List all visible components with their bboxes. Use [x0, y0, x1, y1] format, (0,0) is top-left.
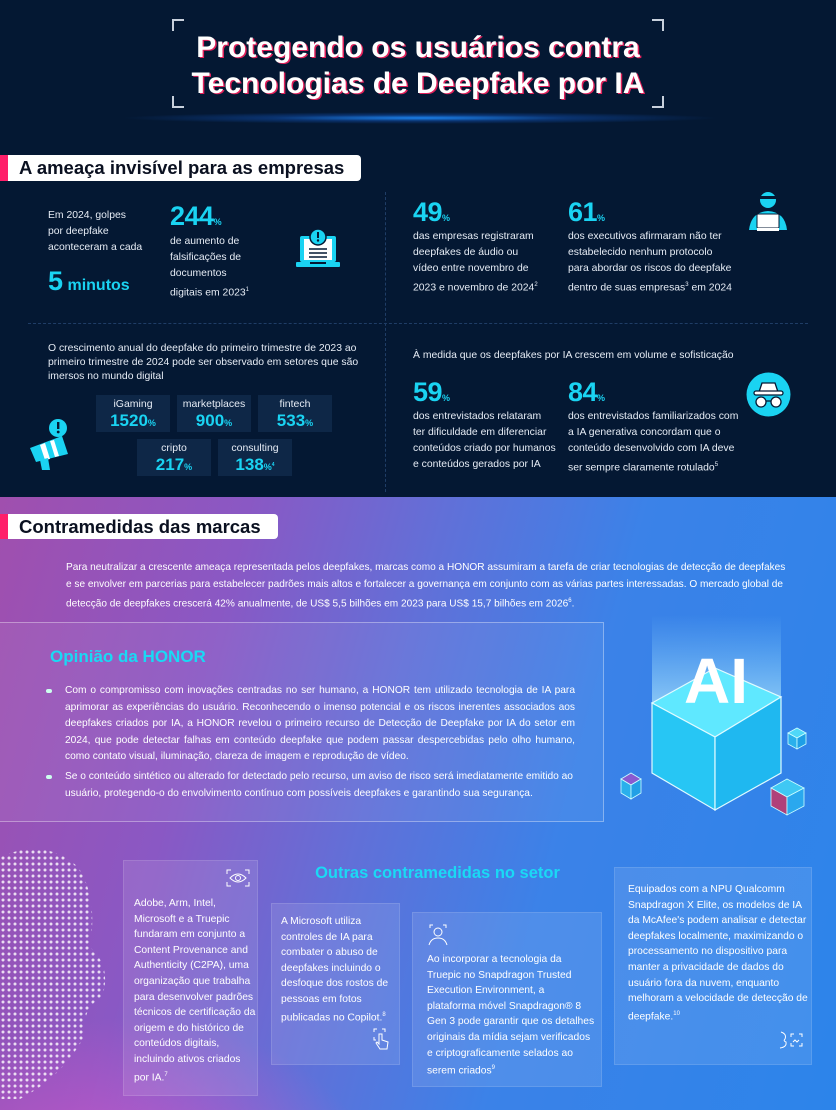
stat: 49%: 49%: [413, 197, 450, 227]
stat: 244%: 244%: [170, 201, 222, 231]
glow line: [120, 112, 720, 124]
dotted face: [2, 850, 106, 1099]
stat: 61%: 61%: [568, 197, 605, 227]
stat: 61%: para abordar os riscos do deepfake: [568, 263, 731, 274]
stat: 5 minutos: Em 2024, golpes: [48, 210, 126, 221]
text: as deepfakes grow: À medida que os deepfakes por IA crescem em volume e sofisticação: [413, 350, 734, 361]
stat: 244%: falsificações de: [170, 252, 241, 263]
sector stat boxes: consulting: [231, 442, 279, 454]
icon: face scan: [428, 924, 448, 946]
title text: Tecnologias de Deepfake por IA: [192, 67, 644, 100]
stat: 49%: deepfakes de áudio ou: [413, 247, 518, 258]
icon: hand tap: [374, 1028, 388, 1050]
stat: 49%: [413, 197, 538, 293]
sector stat boxes: 138%4: [235, 455, 275, 474]
text: growth intro: O crescimento anual do deepfake do primeiro trimestre de 2023 ao primeiro trimestre de 2024 pode ser observado em setores que são imersos no mundo digital: [48, 343, 358, 382]
sector stat boxes: marketplaces: [183, 398, 245, 410]
card: Microsoft: [271, 903, 400, 1065]
card: C2PA: Adobe, Arm, Intel, Microsoft e a Truepic fundaram em conjunto a Content Provenance and Authenticity (C2PA), uma organização que trabalha para desenvolver padrões técnicos de certificação da origem e do histórico de conteúdos digitais, incluindo ativos criados por IA.7: [134, 898, 255, 1083]
sector stat boxes: 217%: [156, 455, 192, 474]
stat: 244%: digitais em 20231: [170, 287, 249, 298]
sector stat boxes: fintech: [280, 398, 310, 410]
stat: 49%: 2023 e novembro de 20242: [413, 282, 538, 293]
stat: 84%: 84%: [568, 377, 605, 407]
stat: 59%: dos entrevistados relataram: [413, 411, 541, 422]
section header: threat: A ameaça invisível para as empresas: [19, 157, 344, 178]
icon: face scan profile: [780, 1032, 802, 1048]
stat: 5 minutos: [48, 210, 142, 296]
illustration: AI cube: AI: [684, 645, 748, 717]
illustration: AI cube: [620, 626, 807, 816]
sector stat boxes: 1520%: [110, 411, 156, 430]
stat: 5 minutos: aconteceram a cada: [48, 242, 142, 253]
panel: HONOR opinion: [0, 622, 604, 822]
stat: 5 minutos: por deepfake: [48, 226, 109, 237]
sector stat boxes: iGaming: [113, 398, 153, 410]
card: McAfee: Equipados com a NPU Qualcomm Snapdragon X Elite, os modelos de IA da McAfee's podem analisar e detectar deepfakes localmente, maximizando o processamento no dispositivo para manter a privacidade de dados do usuário fora da nuvem, enquanto melhoram a velocidade de detecção de deepfake.10: [628, 884, 808, 1022]
section header: countermeasures: Contramedidas das marcas: [19, 516, 261, 537]
title text: [192, 31, 646, 100]
stat: 244%: [170, 201, 249, 298]
card: Truepic Snapdragon: Ao incorporar a tecnologia da Truepic no Snapdragon Trusted Execution Environment, a plataforma móvel Snapdragon® 8 Gen 3 pode garantir que os detalhes originais da mídia sejam verificados e criptograficamente selados ao serem criados9: [427, 954, 594, 1077]
icon: person with laptop: [749, 192, 787, 231]
stat: 5 minutos: 5 minutos: [48, 266, 130, 296]
dividers: [28, 323, 808, 324]
sector stat boxes: [96, 395, 332, 476]
lower section background: [0, 497, 836, 1110]
bullet 2: Se o conteúdo sintético ou alterado for detectado pelo recurso, um aviso de risco será imediatamente emitido ao usuário, protegendo-o do envolvimento contínuo com possíveis deepfakes e garantindo sua segurança.: [65, 771, 573, 798]
stat: 59%: [413, 377, 556, 470]
sector stat boxes: 533%: [277, 411, 313, 430]
stat: 244%: documentos: [170, 268, 227, 279]
title block: [144, 19, 696, 124]
stat: 61%: dos executivos afirmaram não ter: [568, 231, 722, 242]
card: Truepic Snapdragon: [412, 912, 602, 1087]
heading: other countermeasures: Outras contramedidas no setor: [315, 864, 560, 882]
stat: 59%: conteúdos criado por humanos: [413, 443, 556, 454]
stat: 61%: estabelecido nenhum protocolo: [568, 247, 712, 258]
stat: 84%: [568, 377, 738, 473]
stat: 59%: 59%: [413, 377, 450, 407]
sector stat boxes: cripto: [161, 442, 187, 454]
stat: 244%: de aumento de: [170, 236, 239, 247]
title text: Protegendo os usuários contra: [196, 31, 640, 64]
icon: eye: [226, 870, 250, 886]
stat: 84%: dos entrevistados familiarizados com: [568, 411, 738, 422]
intro paragraph: Para neutralizar a crescente ameaça representada pelos deepfakes, marcas como a HONOR assumiram a tarefa de criar tecnologias de detecção de deepfakes e se envolver em parcerias para estabelecer padrões mais altos e fortalecer a governança em conjunto com as várias partes interessadas. O mercado global de detecção de deepfakes crescerá 42% anualmente, de US$ 5,5 bilhões em 2023 para US$ 15,7 bilhões em 20266.: [66, 562, 785, 609]
bullet 1: Com o compromisso com inovações centradas no ser humano, a HONOR tem utilizado tecnologia de IA para aprimorar as experiências do usuário. Reconhecendo o imenso potencial e os riscos inerentes associados aos deepfakes criados por IA, a HONOR revelou o primeiro recurso de Detecção de Deepfake por IA do setor em 2024, que pode detectar falhas em conteúdo deepfake que podem passar despercebidas pelo olho humano, como contato visual, iluminação, clareza de imagem e reprodução de vídeo.: [65, 685, 575, 762]
stat: 59%: ter dificuldade em diferenciar: [413, 427, 546, 438]
stat: 49%: vídeo entre novembro de: [413, 263, 529, 274]
sector stat boxes: 900%: [196, 411, 232, 430]
icon: megaphone: [30, 419, 68, 470]
stat: 84%: conteúdo desenvolvido com IA deve: [568, 443, 734, 454]
icon: incognito: [746, 372, 790, 416]
stat: 61%: dentro de suas empresas3 em 2024: [568, 282, 732, 293]
icon: laptop alert: [296, 230, 340, 267]
card: McAfee: [614, 867, 812, 1065]
card: Microsoft: A Microsoft utiliza controles de IA para combater o abuso de deepfakes incluindo o desfoque dos rostos de pessoas em fotos publicadas no Copilot.8: [281, 916, 388, 1023]
stat: 59%: e conteúdos gerados por IA: [413, 459, 541, 470]
heading: Opinião da HONOR: [50, 647, 206, 666]
stat: 84%: ser sempre claramente rotulado5: [568, 462, 718, 473]
stat: 61%: [568, 197, 732, 293]
stat: 84%: a IA generativa concordam que o: [568, 427, 720, 438]
stat: 49%: das empresas registraram: [413, 231, 534, 242]
